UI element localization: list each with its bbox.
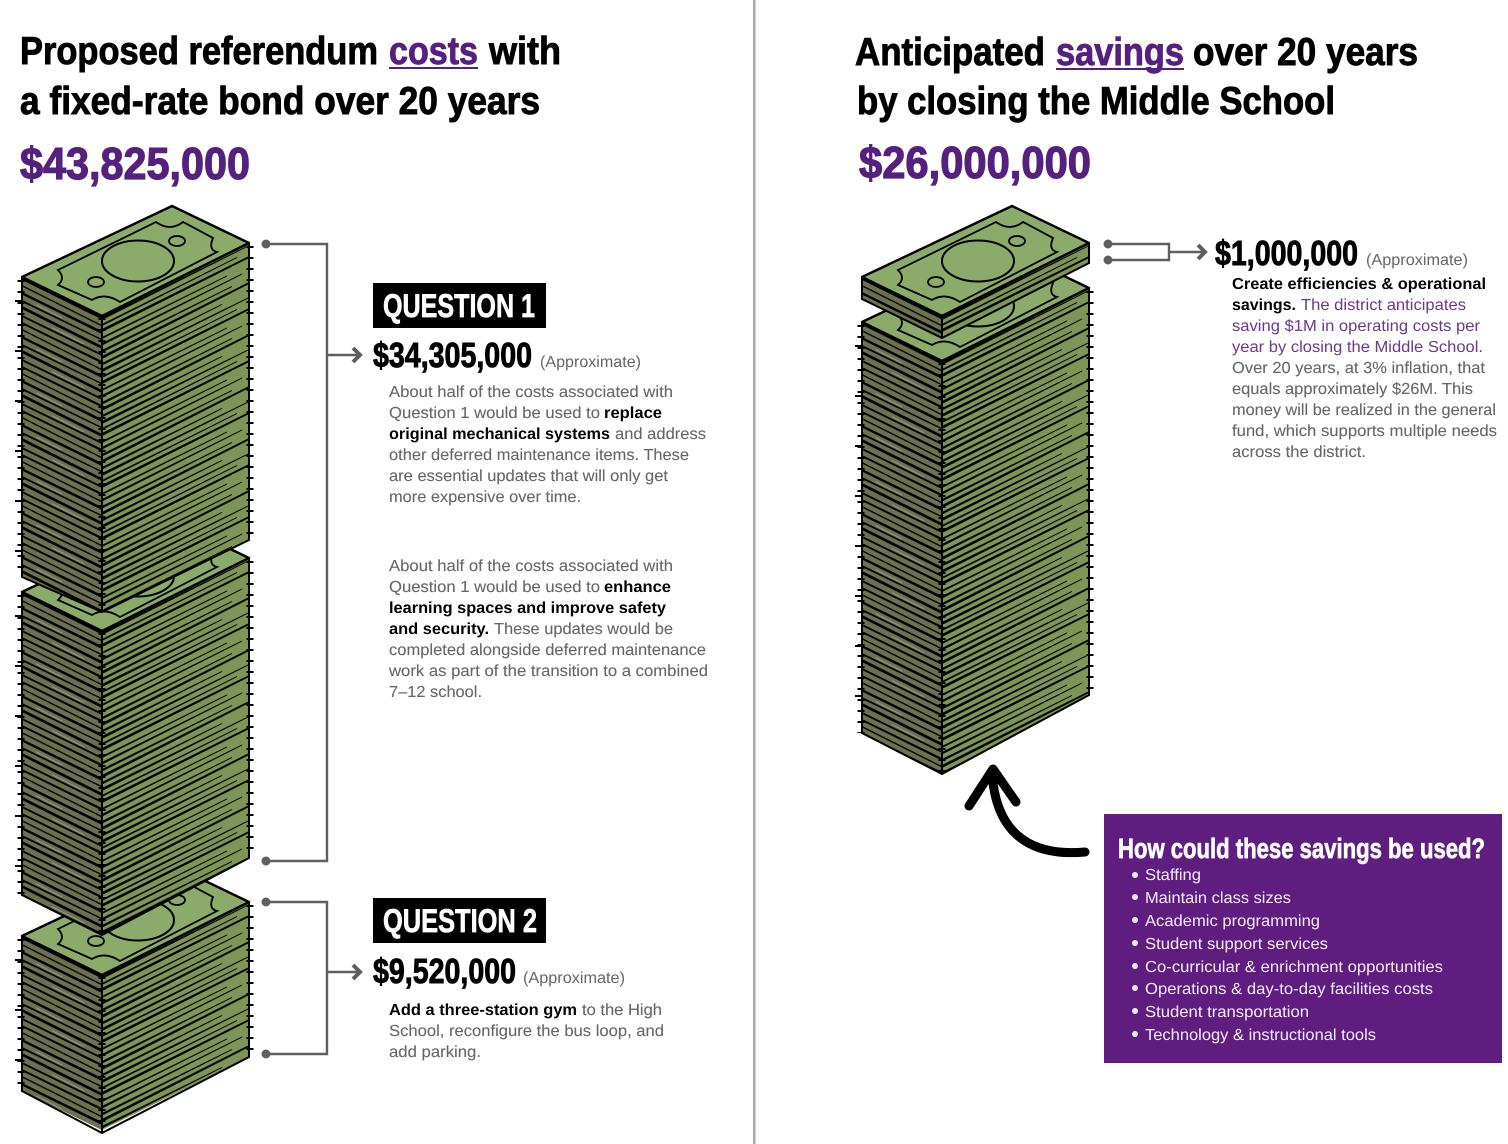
text: question 1 learning spaces: and security.: [389, 621, 489, 638]
text: question 1 learning spaces: learning spaces and improve safety: [389, 600, 666, 617]
text: question 2: to the High: [582, 1002, 662, 1019]
text: question 1 learning spaces: About half of the costs associated with: [389, 558, 673, 575]
heading: anticipated savings: Anticipated: [855, 31, 1045, 74]
amount: question 2: [373, 952, 625, 991]
bullet list: Technology & instructional tools: [1145, 1027, 1376, 1044]
divider between panels: [753, 0, 756, 1144]
bullet list: Student transportation: [1145, 1004, 1309, 1021]
label: question 2: QUESTION 2: [383, 902, 537, 939]
bullet list: Maintain class sizes: [1145, 890, 1291, 907]
text: efficiencies and savings: money will be realized in the general: [1232, 402, 1496, 419]
text: efficiencies and savings: savings.: [1232, 297, 1296, 314]
total savings figure: $26,000,000: [859, 137, 1091, 188]
text: question 1 mechanical systems: About half of the costs associated with: [389, 384, 673, 401]
amount: question 1: (Approximate): [540, 354, 641, 371]
amount: one million: $1,000,000: [1215, 234, 1358, 273]
bullet list: Academic programming: [1145, 913, 1320, 930]
text: question 1 learning spaces: 7–12 school.: [389, 684, 482, 701]
text: efficiencies and savings: Create efficiencies & operational: [1232, 276, 1486, 293]
amount: question 2: (Approximate): [523, 970, 625, 987]
heading: anticipated savings: [855, 31, 1418, 123]
panel: anticipated savings: [855, 31, 1502, 1063]
amount: one million: [1215, 234, 1468, 273]
bracket arrow: one million: [1104, 240, 1205, 264]
text: efficiencies and savings: year by closing the Middle School.: [1232, 339, 1483, 356]
text: efficiencies and savings: saving $1M in operating costs per: [1232, 318, 1481, 335]
text: question 1 mechanical systems: replace: [604, 405, 662, 422]
text: question 2: Add a three-station gym: [389, 1002, 577, 1019]
heading: referendum costs: Proposed referendum: [20, 30, 378, 73]
heading: referendum costs: costs: [389, 30, 478, 73]
illustration: stack of bills, question 1 upper: [19, 206, 250, 612]
text: efficiencies and savings: [1232, 276, 1497, 461]
amount: question 2: $9,520,000: [373, 952, 516, 991]
text: efficiencies and savings: fund, which supports multiple needs: [1232, 423, 1497, 440]
text: question 1 learning spaces: work as part of the transition to a combined: [388, 663, 708, 680]
label: question 1: QUESTION 1: [383, 287, 535, 324]
text: efficiencies and savings: Over 20 years, at 3% inflation, that: [1232, 360, 1486, 377]
heading: anticipated savings: savings: [1056, 31, 1184, 74]
text: question 1 mechanical systems: [389, 384, 706, 506]
text: question 1 mechanical systems: are essential updates that will only get: [389, 468, 669, 485]
text: efficiencies and savings: The district anticipates: [1301, 297, 1466, 314]
bullet list: Operations & day-to-day facilities costs: [1145, 981, 1433, 998]
text: question 1 mechanical systems: and address: [615, 426, 706, 443]
text: question 2: add parking.: [389, 1044, 481, 1061]
illustration: stack of bills, question 2: [19, 865, 250, 1133]
text: efficiencies and savings: across the district.: [1232, 444, 1366, 461]
bullet list: Student support services: [1145, 936, 1328, 953]
text: question 1 learning spaces: completed alongside deferred maintenance: [389, 642, 706, 659]
heading: referendum costs: with: [488, 30, 561, 73]
text: question 1 mechanical systems: original mechanical systems: [389, 426, 610, 443]
illustration: single bundle of bills: [862, 206, 1089, 338]
heading: anticipated savings: by closing the Middle School: [857, 80, 1335, 123]
text: question 1 learning spaces: These updates would be: [494, 621, 673, 638]
illustration: stack of bills, question 1 lower: [19, 521, 250, 935]
text: efficiencies and savings: equals approximately $26M. This: [1232, 381, 1473, 398]
text: question 2: [389, 1002, 664, 1061]
amount: question 1: $34,305,000: [373, 336, 532, 375]
text: question 1 learning spaces: [388, 558, 708, 701]
text: question 2: School, reconfigure the bus loop, and: [389, 1023, 664, 1040]
text: question 1 mechanical systems: more expensive over time.: [389, 489, 581, 506]
amount: one million: (Approximate): [1366, 252, 1468, 269]
heading: referendum costs: [20, 30, 561, 123]
text: question 1 mechanical systems: Question 1 would be used to: [389, 405, 600, 422]
text: question 1 learning spaces: enhance: [604, 579, 671, 596]
heading: referendum costs: a fixed-rate bond over 20 years: [20, 80, 540, 123]
arrow: curved arrow to stack: [969, 769, 1085, 853]
illustration: large stack of bills: [859, 251, 1090, 774]
panel: referendum costs: [19, 30, 708, 1133]
text: question 1 mechanical systems: other deferred maintenance items. These: [389, 447, 689, 464]
bullet list: [1132, 867, 1443, 1044]
bracket arrow: question 1: [262, 240, 360, 866]
callout: how savings could be used: [1104, 814, 1502, 1063]
label: question 2: [373, 898, 546, 943]
label: question 1: [373, 283, 546, 328]
text: question 1 learning spaces: Question 1 would be used to: [389, 579, 600, 596]
total cost figure: $43,825,000: [20, 138, 250, 189]
heading: anticipated savings: over 20 years: [1193, 31, 1418, 74]
bullet list: Staffing: [1145, 867, 1201, 884]
bullet list: Co-curricular & enrichment opportunities: [1145, 959, 1443, 976]
bracket arrow: question 2: [262, 898, 360, 1058]
